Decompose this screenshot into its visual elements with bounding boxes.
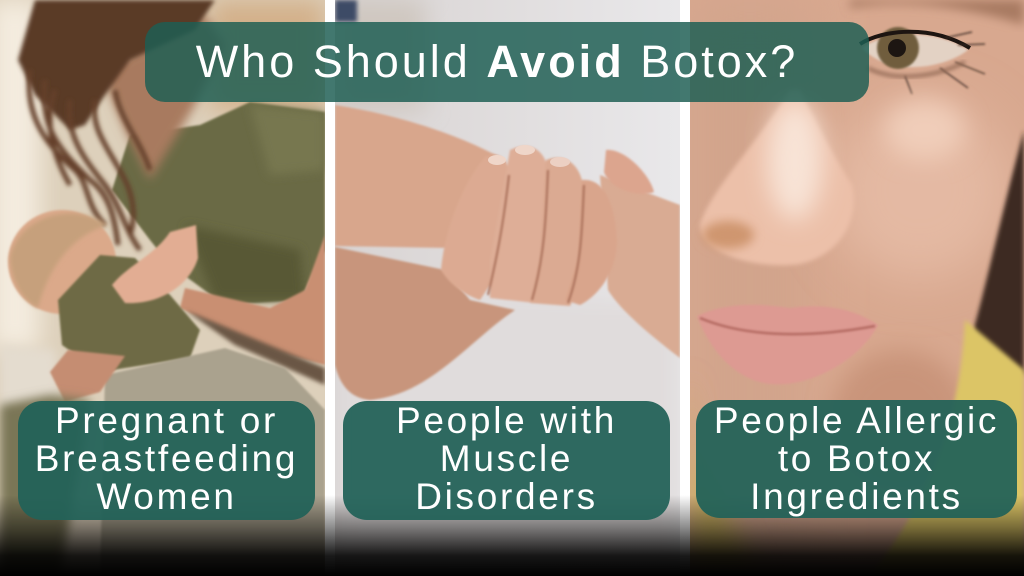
- thumb: [604, 150, 654, 194]
- caption: people with muscle disorders: Muscle: [440, 438, 573, 478]
- bottom fade: [0, 495, 1024, 576]
- photo: close-up of face: [690, 0, 1024, 576]
- shirt: [112, 102, 325, 305]
- fist: [441, 146, 617, 306]
- forearm: [335, 105, 520, 248]
- caption: pregnant or breastfeeding women: Pregnant or: [55, 400, 278, 440]
- right arm: [600, 175, 680, 358]
- title: [145, 22, 869, 102]
- eyebrow shadow: [850, 0, 1024, 25]
- nose: [700, 90, 854, 265]
- mother hand: [50, 350, 125, 402]
- caption: pregnant or breastfeeding women: [18, 401, 315, 520]
- blanket: [0, 350, 58, 404]
- face and neck in shadow: [100, 15, 225, 180]
- caption: pregnant or breastfeeding women: Breastfeeding: [35, 438, 298, 478]
- photo: breastfeeding mother and baby: [0, 0, 325, 576]
- baby arm: [112, 225, 198, 303]
- caption: people allergic to botox ingredients: Ingredients: [750, 476, 963, 517]
- baby head: [8, 210, 116, 314]
- caption: people with muscle disorders: People with: [396, 400, 617, 440]
- caption: people allergic to botox ingredients: to Botox: [778, 438, 935, 479]
- caption: people with muscle disorders: Disorders: [415, 476, 598, 516]
- title: Who Should Avoid Botox?: [196, 36, 798, 87]
- lower arm: [335, 247, 515, 400]
- cheek shine: [885, 100, 965, 160]
- baby legs: [100, 347, 325, 552]
- baby body: [58, 255, 200, 372]
- caption: pregnant or breastfeeding women: Women: [96, 476, 237, 516]
- photo: hand gripping wrist: [335, 0, 680, 576]
- caption: people allergic to botox ingredients: People Allergic: [714, 400, 999, 441]
- eye: [862, 35, 968, 67]
- shoulder and shirt: [894, 320, 1024, 548]
- arm: [180, 235, 325, 365]
- hair strands: [29, 70, 150, 250]
- caption: people allergic to botox ingredients: [696, 400, 1017, 518]
- hair: [18, 0, 215, 130]
- caption: people with muscle disorders: [343, 401, 670, 520]
- dark hair: [972, 130, 1024, 375]
- lips: [697, 305, 878, 384]
